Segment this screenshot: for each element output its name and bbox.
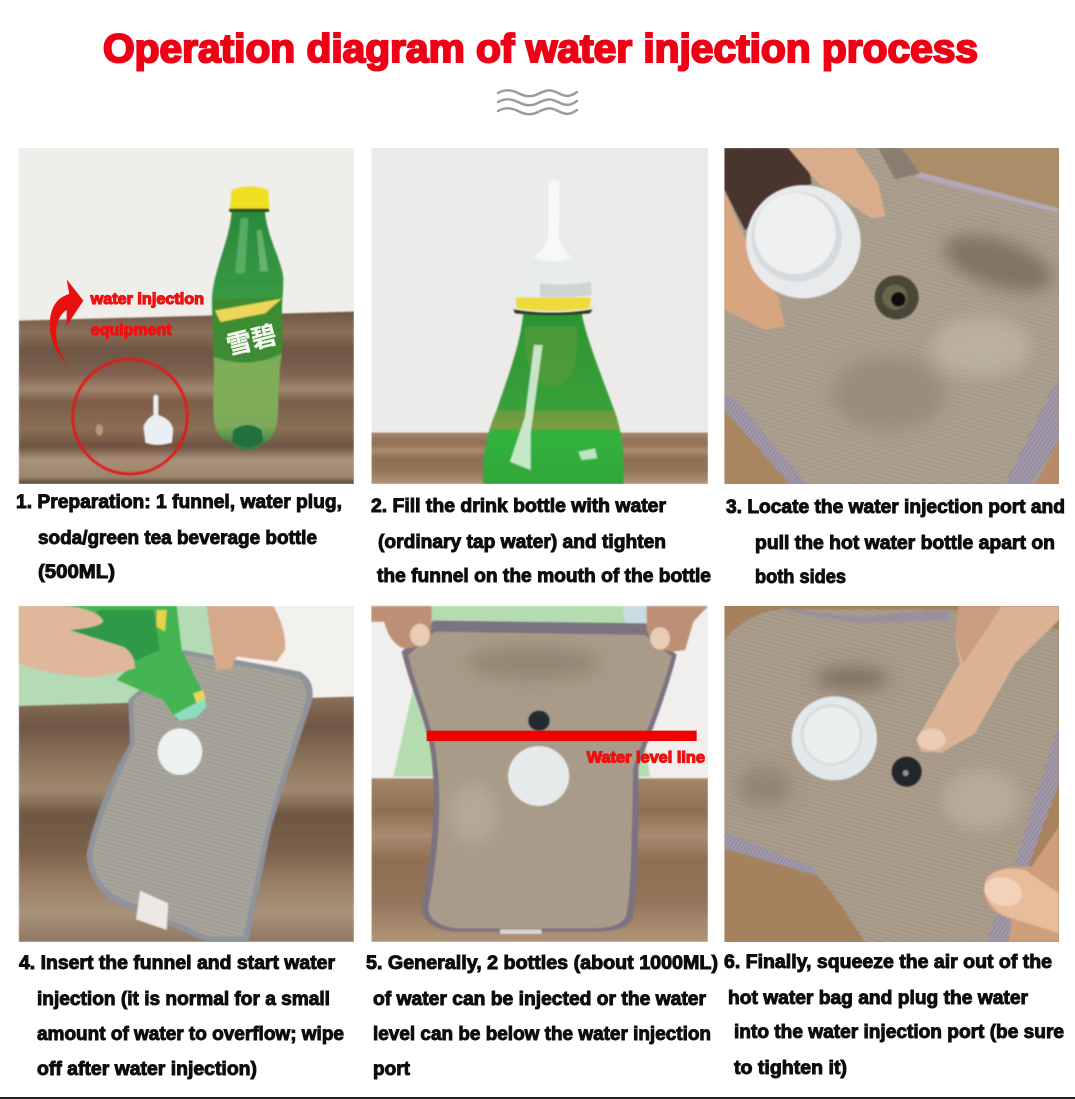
panel: step 5 photo (371, 606, 708, 942)
icon: bottle with funnel (483, 180, 624, 484)
icon: inverted bottle (63, 606, 207, 721)
caption: step 2 (371, 496, 711, 587)
caption: step 5: of water can be injected or the water (373, 989, 707, 1010)
panel: step 1 photo (19, 148, 354, 484)
bottle label text: 雪碧 (222, 315, 280, 363)
wooden table (19, 312, 354, 484)
panel: step 4 photo (19, 606, 354, 942)
arrow: curved red (50, 279, 83, 367)
callout: water level line: Water level line (587, 749, 705, 766)
caption: step 2: the funnel on the mouth of the bottle (377, 566, 711, 587)
icon: white plug (158, 728, 202, 775)
caption: step 4: amount of water to overflow; wipe (37, 1024, 344, 1045)
bag fabric (402, 621, 677, 934)
caption: step 3: 3. Locate the water injection port and (726, 497, 1065, 518)
bottom rule (0, 1097, 1075, 1099)
callout: water injection equipment: equipment (91, 322, 172, 339)
caption: step 5: level can be below the water injection (373, 1024, 711, 1045)
panel: step 3 photo (724, 148, 1059, 484)
panel: step 2 photo (371, 148, 708, 484)
green shirt (393, 606, 650, 777)
caption: step 4 (19, 953, 344, 1080)
hands (371, 606, 708, 652)
caption: step 1: (500ML) (38, 562, 115, 583)
icon: funnel and plug (96, 395, 173, 445)
icon: care tag (136, 891, 168, 930)
hands (916, 606, 1059, 942)
caption: step 3: both sides (755, 567, 846, 588)
caption: step 4: off after water injection) (37, 1059, 257, 1080)
caption: step 2: 2. Fill the drink bottle with water (371, 496, 667, 517)
caption: step 1: soda/green tea beverage bottle (38, 528, 317, 549)
callout: water injection equipment (90, 291, 204, 339)
caption: step 1: 1. Preparation: 1 funnel, water plug, (16, 492, 342, 513)
fabric shading (738, 667, 1022, 830)
callout: water injection equipment: water injection (90, 291, 204, 308)
bag fabric (724, 148, 1059, 484)
caption: step 5 (366, 953, 718, 1080)
panel: step 6 photo (724, 606, 1059, 942)
title: Operation diagram of water injection process (103, 27, 978, 71)
icon: white plug (746, 185, 861, 298)
wooden table (19, 697, 354, 942)
icon: injection port (528, 711, 550, 731)
red circle highlight (73, 359, 187, 474)
caption: step 3 (726, 497, 1065, 588)
icon: water waves (498, 90, 577, 114)
caption: step 3: pull the hot water bottle apart on (755, 533, 1055, 554)
caption: step 6: hot water bag and plug the water (728, 988, 1029, 1009)
wooden table (371, 433, 708, 484)
caption: step 6: to tighten it) (734, 1058, 847, 1079)
caption: step 6 (724, 952, 1064, 1079)
green shirt (19, 606, 217, 707)
caption: step 4: injection (it is normal for a small (37, 989, 330, 1010)
fabric shading (450, 647, 600, 843)
water level line (427, 731, 697, 741)
icon: plugged port (892, 757, 922, 787)
icon: white plug (792, 696, 877, 780)
icon: injection port (875, 275, 919, 319)
hands (19, 606, 285, 677)
caption: step 6: 6. Finally, squeeze the air out of the (724, 952, 1052, 973)
wooden table (371, 778, 708, 942)
caption: step 5: 5. Generally, 2 bottles (about 1000ML) (366, 953, 718, 974)
caption: step 2: (ordinary tap water) and tighten (378, 532, 666, 553)
caption: step 5: port (373, 1059, 411, 1080)
caption: step 1 (16, 492, 342, 583)
bag fabric (724, 608, 1059, 942)
caption: step 6: into the water injection port (be sure (734, 1022, 1064, 1043)
caption: step 4: 4. Insert the funnel and start water (19, 953, 336, 974)
icon: soda bottle (212, 186, 283, 450)
fabric shading (832, 224, 1059, 430)
bag fabric (87, 650, 313, 942)
icon: white plug (508, 746, 569, 806)
hand and bag interior (724, 148, 886, 330)
